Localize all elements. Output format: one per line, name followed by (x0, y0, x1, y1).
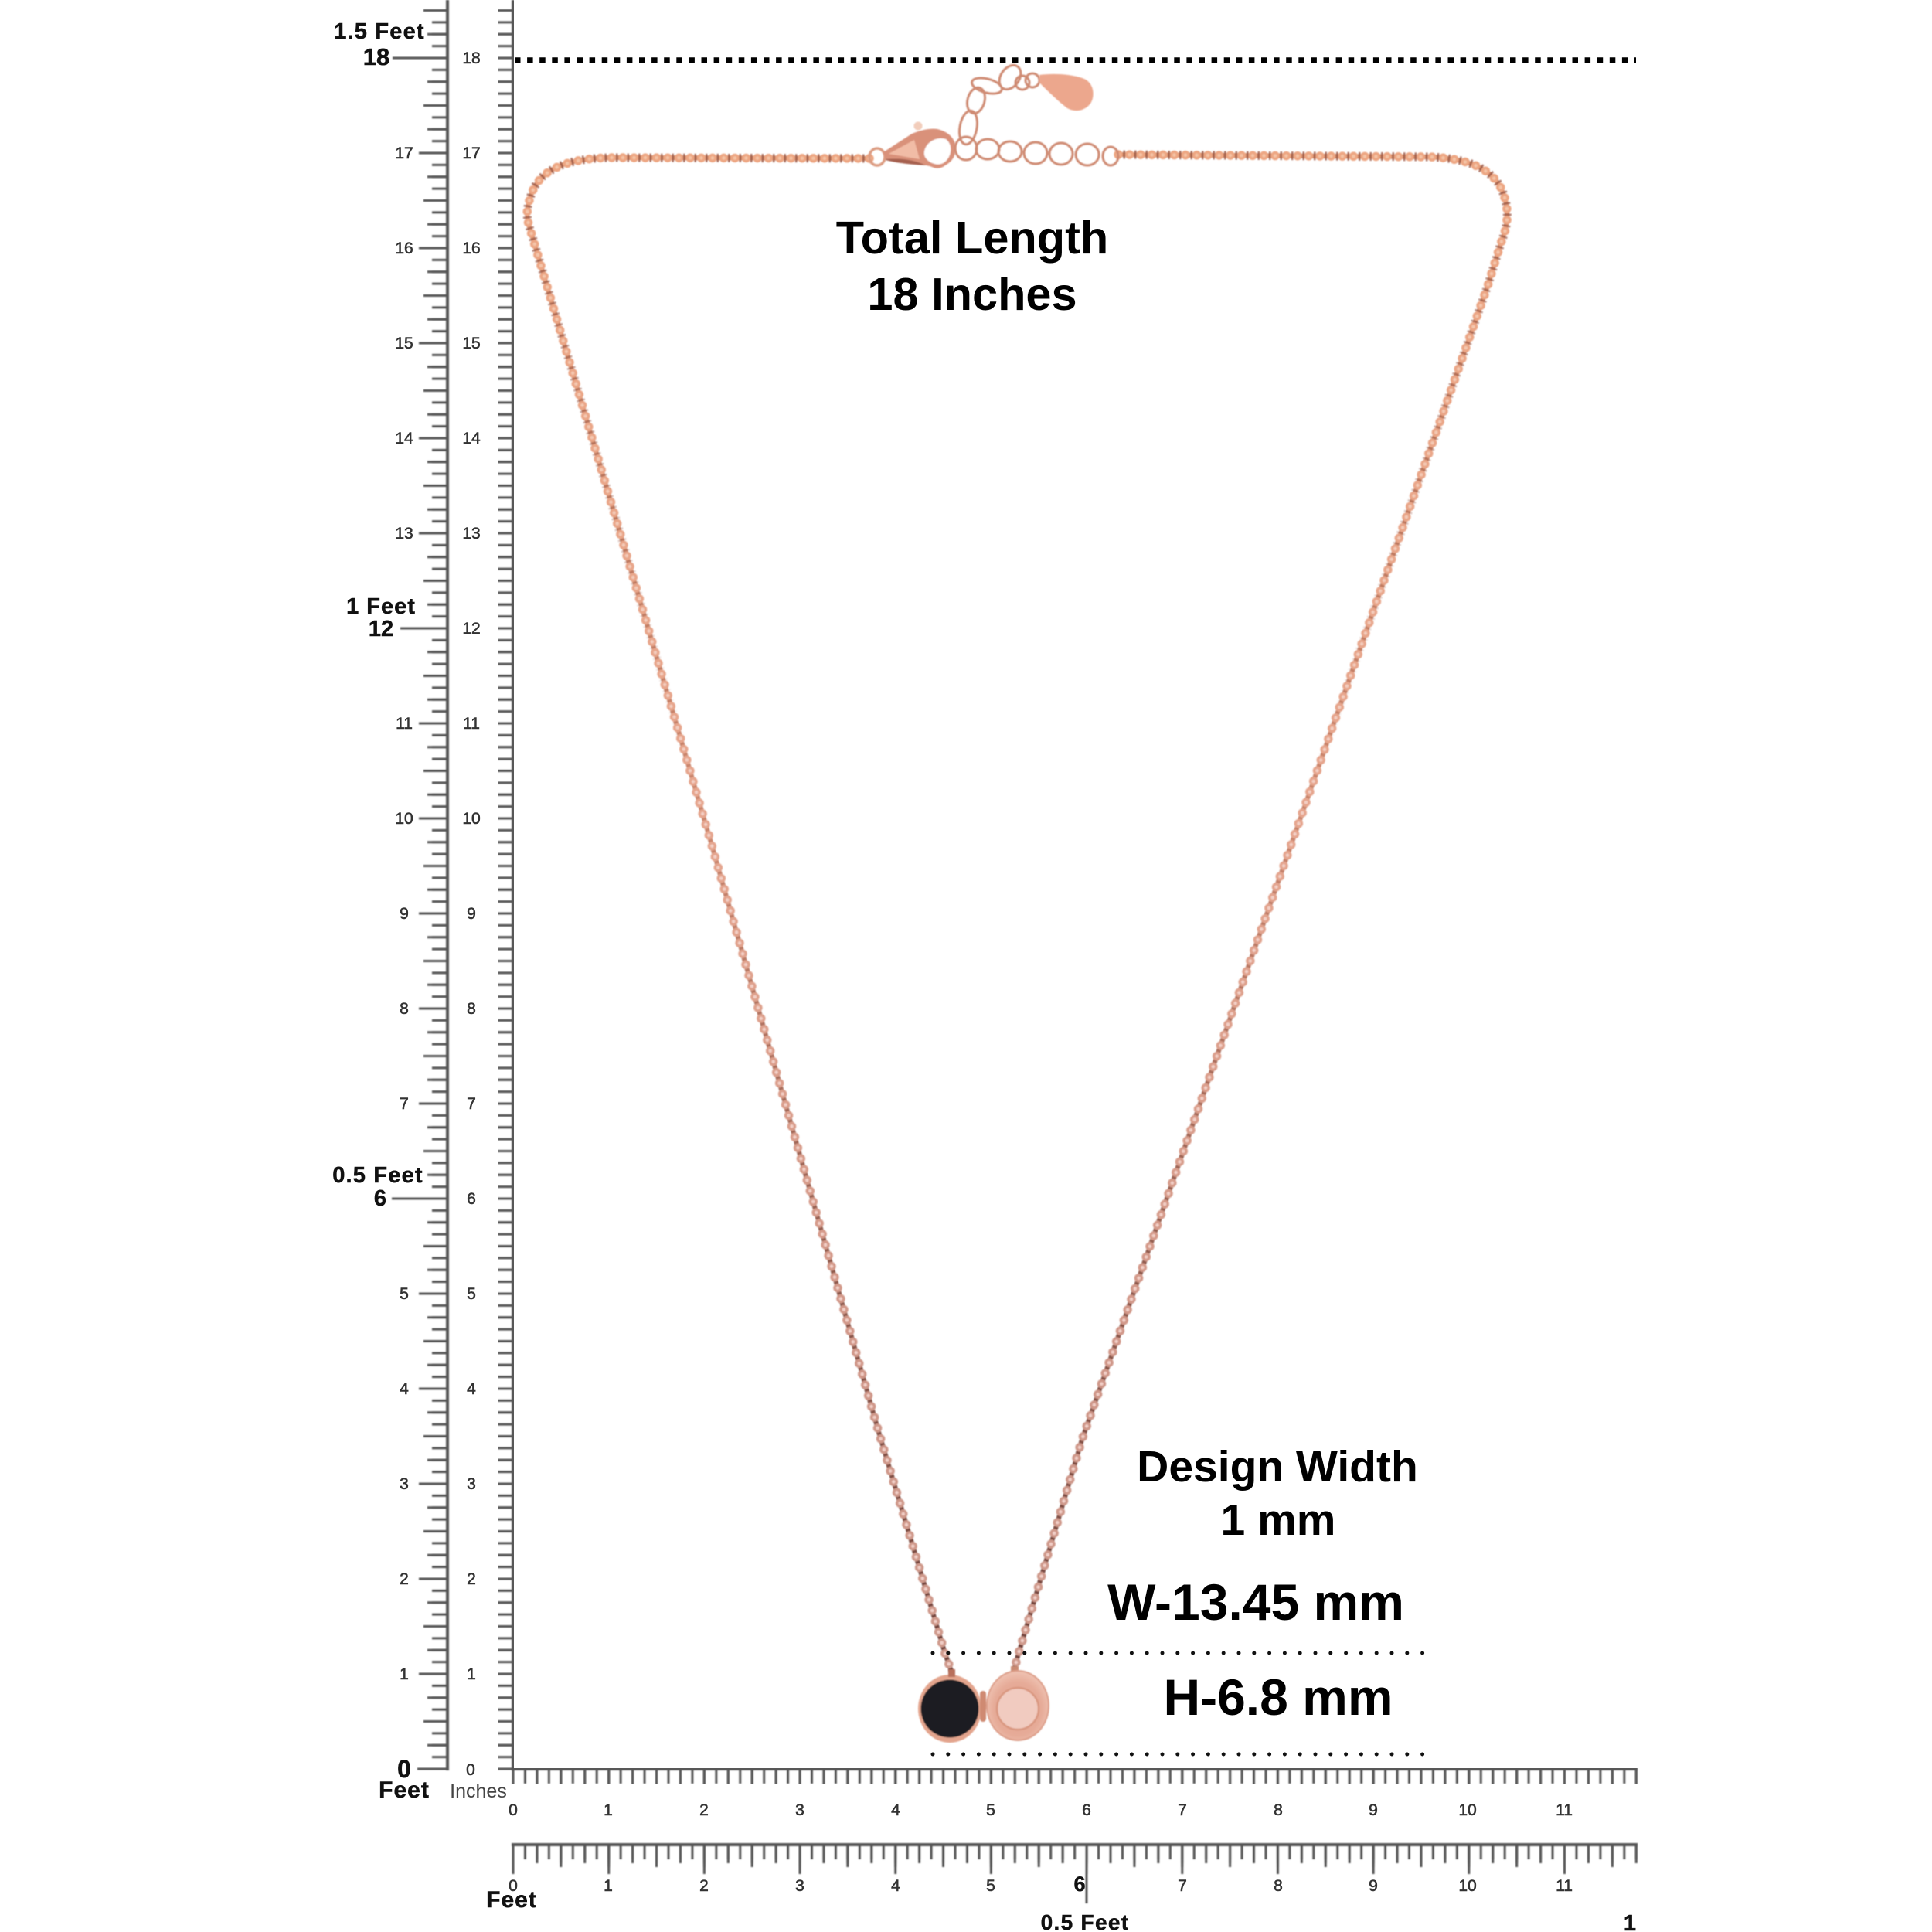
feet scale labels: 12 (369, 617, 393, 641)
feet scale labels: 4 (400, 1380, 409, 1398)
feet scale labels: 0.5 Feet (332, 1163, 423, 1188)
heading: total length: Total Length (836, 212, 1108, 264)
inches scale labels: 1 (467, 1665, 476, 1683)
horizontal inches scale labels: 10 (1458, 1801, 1477, 1819)
lobster clasp (869, 122, 956, 168)
feet scale labels: 16 (395, 240, 413, 257)
inches scale labels: 2 (467, 1570, 476, 1588)
text: pendant height: H-6.8 mm (1163, 1668, 1393, 1726)
pendant: rose gold disc (980, 1666, 1049, 1740)
horizontal feet scale labels: 11 (1556, 1877, 1573, 1895)
horizontal feet scale labels: Feet (486, 1887, 537, 1913)
feet scale labels: 5 (400, 1285, 409, 1303)
horizontal feet scale labels: 4 (891, 1877, 900, 1895)
horizontal inches scale labels: 2 (699, 1801, 709, 1819)
horizontal feet scale labels: 3 (795, 1877, 804, 1895)
ruler: vertical feet scale (392, 0, 447, 1770)
feet scale labels: 10 (395, 810, 413, 828)
ruler: horizontal inches scale (512, 1769, 1638, 1784)
text: design width: 1 mm (1221, 1495, 1335, 1545)
feet scale labels: 17 (395, 145, 413, 162)
ruler: horizontal feet scale (512, 1845, 1638, 1903)
text: design width: Design Width (1137, 1442, 1418, 1492)
horizontal feet scale labels (486, 1872, 1636, 1932)
text: pendant width: W-13.45 mm (1107, 1573, 1404, 1631)
inches scale labels: 0 (466, 1761, 475, 1779)
inches scale labels: 3 (467, 1475, 476, 1493)
feet scale labels: 1 Feet (346, 594, 416, 619)
horizontal feet scale labels: 6 (1073, 1872, 1086, 1896)
inches scale labels: 11 (463, 715, 480, 733)
feet scale labels: 15 (395, 335, 413, 352)
inches scale labels: 7 (467, 1095, 476, 1113)
horizontal inches scale labels: 5 (986, 1801, 995, 1819)
inches scale labels: 14 (462, 430, 481, 447)
heading: total length (836, 212, 1108, 320)
feet scale labels: Feet (379, 1777, 430, 1803)
dotted line: pendant top (933, 1651, 1423, 1655)
horizontal inches scale labels: 4 (891, 1801, 900, 1819)
horizontal inches scale labels: 9 (1369, 1801, 1378, 1819)
horizontal feet scale labels: 7 (1178, 1877, 1187, 1895)
feet scale labels: 9 (400, 905, 409, 923)
feet scale labels: 11 (396, 715, 413, 733)
inches scale labels: 15 (462, 335, 481, 352)
text: design width (1137, 1442, 1418, 1545)
feet scale labels: 7 (400, 1095, 409, 1113)
inches scale labels: 9 (467, 905, 476, 923)
inches scale labels: 18 (462, 49, 481, 67)
feet scale labels: 1 (400, 1665, 409, 1683)
inches scale labels: 13 (462, 525, 481, 543)
horizontal feet scale labels: 5 (986, 1877, 995, 1895)
horizontal feet scale labels: 9 (1369, 1877, 1378, 1895)
extender chain (955, 61, 1118, 165)
inches scale labels: 6 (467, 1190, 476, 1208)
feet scale labels: 2 (400, 1570, 409, 1588)
necklace chain (527, 155, 1507, 1673)
horizontal feet scale labels: 2 (699, 1877, 709, 1895)
inches scale labels: Inches (450, 1781, 507, 1802)
inches scale labels: 12 (462, 620, 481, 638)
inches scale labels: 16 (462, 240, 481, 257)
horizontal inches scale labels: 8 (1274, 1801, 1283, 1819)
horizontal inches scale labels: 7 (1178, 1801, 1187, 1819)
feet scale labels: 13 (395, 525, 413, 543)
inches scale labels: 8 (467, 1000, 476, 1018)
feet scale labels (332, 19, 430, 1803)
inches scale labels: 5 (467, 1285, 476, 1303)
feet scale labels: 18 (363, 43, 389, 70)
feet scale labels: 3 (400, 1475, 409, 1493)
horizontal inches scale labels: 11 (1556, 1801, 1573, 1819)
horizontal feet scale labels: 10 (1458, 1877, 1477, 1895)
dotted line: 18 inch top marker (515, 57, 1636, 63)
inches scale labels (450, 49, 507, 1802)
horizontal feet scale labels: 8 (1274, 1877, 1283, 1895)
horizontal inches scale labels: 0 (509, 1801, 518, 1819)
inches scale labels: 10 (462, 810, 481, 828)
horizontal inches scale labels (509, 1801, 1573, 1819)
inches scale labels: 17 (462, 145, 481, 162)
horizontal feet scale labels: 1 (604, 1877, 613, 1895)
horizontal inches scale labels: 6 (1082, 1801, 1091, 1819)
horizontal inches scale labels: 3 (795, 1801, 804, 1819)
feet scale labels: 0 (397, 1755, 411, 1783)
feet scale labels: 1.5 Feet (334, 19, 425, 44)
horizontal feet scale labels: 0 (509, 1877, 518, 1895)
inches scale labels: 4 (467, 1380, 476, 1398)
feet scale labels: 6 (374, 1186, 386, 1211)
feet scale labels: 14 (395, 430, 413, 447)
heading: total length: 18 Inches (867, 268, 1077, 320)
drop tag (1039, 74, 1094, 111)
dotted line: pendant bottom (933, 1753, 1423, 1756)
horizontal inches scale labels: 1 (604, 1801, 613, 1819)
feet scale labels: 8 (400, 1000, 409, 1018)
pendant: black disc (918, 1669, 981, 1743)
ruler: vertical inches scale (498, 0, 513, 1770)
